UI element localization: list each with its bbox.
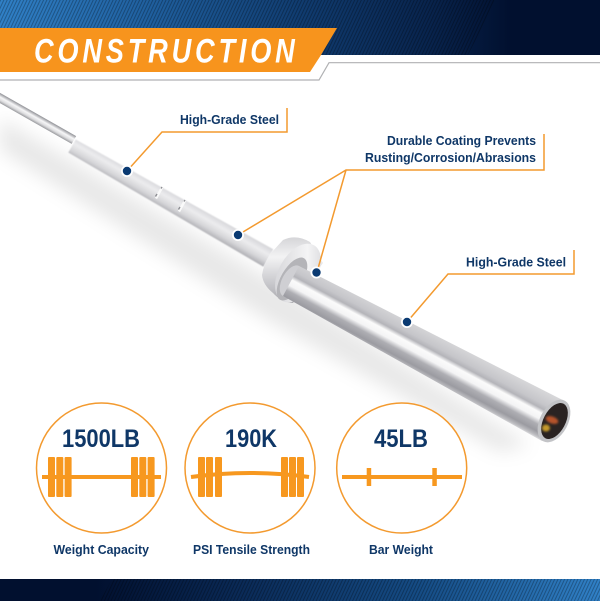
callout: high-grade steel grip — [121, 108, 287, 177]
stat: tensile strength — [185, 403, 315, 557]
icon: loaded barbell — [42, 457, 161, 497]
stat: tensile strength: PSI Tensile Strength — [193, 542, 310, 557]
callout: high-grade steel grip: High-Grade Steel — [180, 112, 279, 127]
callout: durable coating: Rusting/Corrosion/Abrasions — [365, 150, 536, 165]
stat: bar weight: 45LB — [374, 425, 428, 453]
grip rings — [156, 187, 185, 212]
callout: durable coating: Durable Coating Prevents — [387, 133, 536, 148]
callout: high-grade steel sleeve: High-Grade Steel — [466, 254, 566, 270]
callout: durable coating — [232, 133, 544, 278]
stat: bar weight: Bar Weight — [369, 542, 434, 557]
bar shadow — [0, 118, 530, 452]
bottom band — [0, 579, 600, 601]
stat: weight capacity — [36, 403, 166, 557]
thin shaft — [0, 92, 76, 144]
top header band — [0, 0, 600, 55]
collar — [262, 236, 330, 310]
stat: bar weight — [337, 403, 467, 557]
knurled grip — [67, 137, 273, 267]
icon: empty bar — [342, 468, 462, 486]
callout: high-grade steel sleeve — [401, 250, 574, 328]
header underline — [0, 63, 600, 80]
stat: tensile strength: 190K — [225, 425, 277, 453]
stat: weight capacity: Weight Capacity — [54, 542, 150, 557]
icon: bending barbell — [191, 457, 309, 497]
title banner — [0, 28, 337, 72]
sleeve end cap — [531, 394, 577, 448]
stat: weight capacity: 1500LB — [62, 425, 140, 453]
title banner: CONSTRUCTION — [34, 32, 295, 70]
sleeve — [272, 256, 564, 441]
barbell photo — [0, 92, 577, 452]
